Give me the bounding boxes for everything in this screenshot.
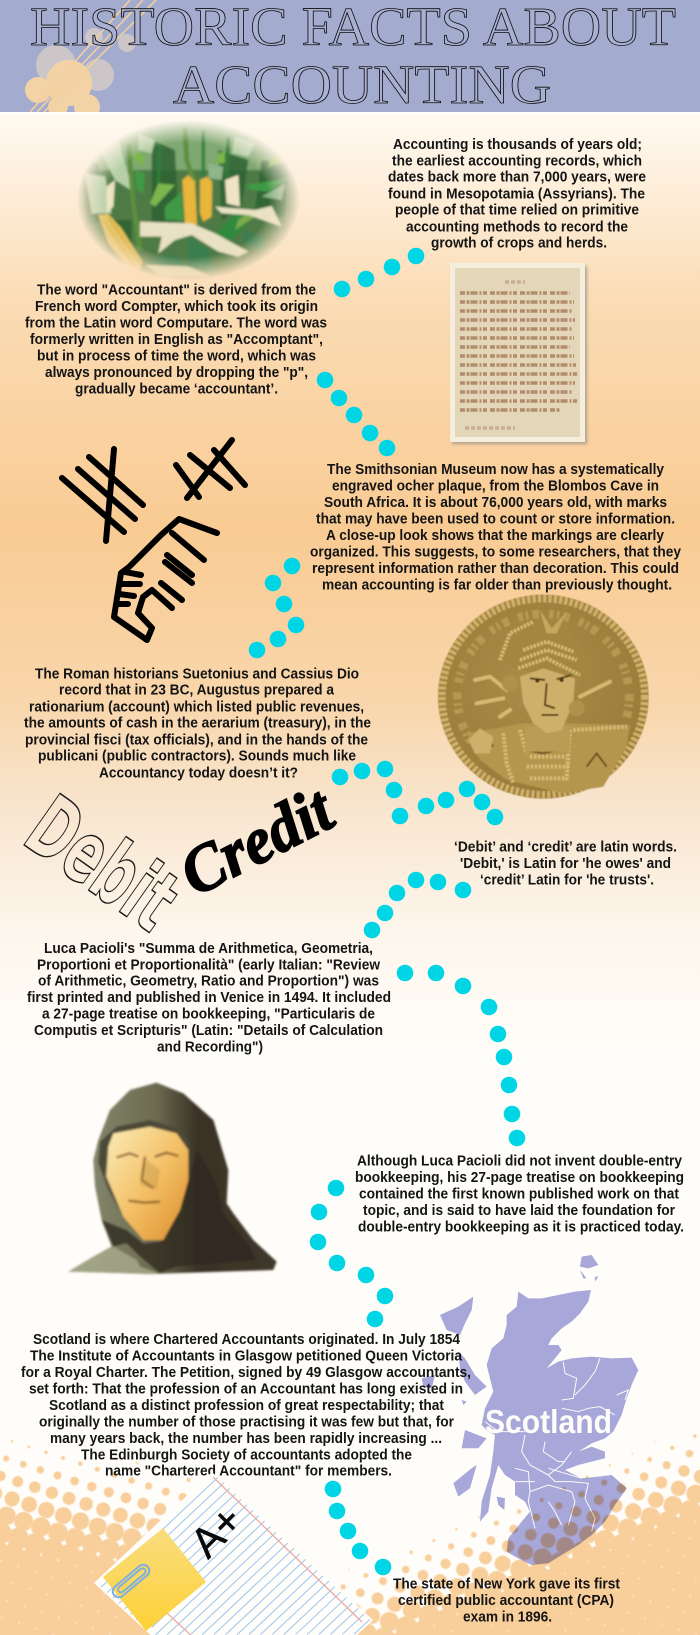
text block: Luca Pacioli's Summa: Luca Pacioli's "Summa de Arithmetica, Geometria,: [44, 941, 373, 957]
text block: double-entry bookkeeping: contained the first known published work on that: [359, 1187, 679, 1203]
text block: word accountant: gradually became ‘accountant’.: [75, 381, 278, 397]
text block: earliest records: accounting methods to record the: [406, 219, 628, 235]
dotted connector 5: [364, 872, 471, 938]
dotted connector 3: [249, 558, 304, 658]
text block: Roman historians: [24, 666, 371, 781]
image: gold Roman coin: [438, 595, 649, 799]
text block: Roman historians: record that in 23 BC, Augustus prepared a: [59, 683, 335, 699]
text block: debit and credit meaning: [454, 840, 677, 889]
text block: debit and credit meaning: ‘Debit’ and ‘credit’ are latin words.: [454, 840, 677, 856]
text block: double-entry bookkeeping: Although Luca Pacioli did not invent double-entry: [357, 1154, 682, 1170]
image: graded paper with sticky note: [94, 1472, 373, 1635]
text block: New York CPA exam: certified public accountant (CPA): [398, 1593, 614, 1609]
text block: Blombos plaque: engraved ocher plaque, from the Blombos Cave in: [332, 478, 659, 494]
text block: double-entry bookkeeping: bookkeeping, his 27-page treatise on bookkeeping: [355, 1170, 684, 1186]
text block: Scotland chartered accountants: The Institute of Accountants in Glasgow petitioned Queen Victoria: [30, 1348, 463, 1364]
text block: Scotland chartered accountants: Scotland as a distinct profession of great respectability; that: [49, 1398, 444, 1414]
head: [525, 727, 570, 752]
dotted connector 6: [397, 965, 525, 1146]
text block: New York CPA exam: exam in 1896.: [463, 1609, 552, 1625]
map of Scotland: [422, 1255, 638, 1565]
text block: Roman historians: publicani (public contractors). Sounds much like: [38, 749, 356, 765]
image: ancient manuscript: [450, 263, 587, 444]
text block: Roman historians: the amounts of cash in the aerarium (treasury), in the: [24, 716, 371, 732]
word art: Credit: Credit: [169, 772, 346, 910]
text block: Scotland chartered accountants: name "Chartered Accountant" for members.: [105, 1464, 392, 1480]
word art: Debit: Debit: [8, 777, 196, 951]
title banner: [0, 0, 700, 120]
bust: [467, 723, 630, 793]
text block: earliest records: growth of crops and herds.: [431, 236, 607, 252]
dotted connector 8: [325, 1481, 391, 1575]
face: [107, 1127, 188, 1240]
text block: word accountant: French word Compter, which took its origin: [35, 299, 318, 315]
text block: Scotland chartered accountants: The Edinburgh Society of accountants adopted the: [81, 1447, 412, 1463]
title: ACCOUNTING: [173, 54, 551, 115]
text block: Blombos plaque: mean accounting is far older than previously thought.: [322, 577, 672, 593]
text block: Roman historians: provincial fisci (tax officials), and in the hands of the: [25, 732, 368, 748]
text block: Blombos plaque: organized. This suggests, to some researchers, that they: [310, 544, 681, 560]
text block: Luca Pacioli's Summa: [27, 941, 391, 1056]
text block: Blombos plaque: that may have been used to count or store information.: [316, 511, 675, 527]
text block: Blombos plaque: South Africa. It is about 76,000 years old, with marks: [324, 495, 667, 511]
text block: New York CPA exam: The state of New York gave its first: [393, 1576, 620, 1592]
text block: debit and credit meaning: ‘credit’ Latin for 'he trusts'.: [480, 873, 654, 889]
icon: tally marks and hand: [62, 440, 245, 640]
text block: Scotland chartered accountants: for a Royal Charter. The Petition, signed by 49 Glasgow accountants,: [21, 1365, 471, 1381]
text block: Scotland chartered accountants: many years back, the number has been rapidly increasing ...: [50, 1431, 442, 1447]
map label: Scotland: Scotland: [485, 1403, 612, 1440]
text block: Roman historians: The Roman historians Suetonius and Cassius Dio: [35, 666, 359, 682]
text block: Roman historians: rationarium (account) which listed public revenues,: [29, 699, 364, 715]
text block: Luca Pacioli's Summa: Computis et Scripturis" (Latin: "Details of Calculation: [34, 1023, 383, 1039]
text block: word accountant: formerly written in English as "Accomptant",: [30, 332, 323, 348]
text block: word accountant: from the Latin word Computare. The word was: [25, 315, 327, 331]
text block: earliest records: people of that time relied on primitive: [395, 203, 639, 219]
text block: earliest records: the earliest accounting records, which: [392, 153, 642, 169]
text block: Blombos plaque: [310, 462, 681, 593]
hood: [68, 1083, 277, 1274]
text block: Luca Pacioli's Summa: Proportioni et Proportionalità" (early Italian: "Review: [37, 957, 381, 973]
text block: Scotland chartered accountants: originally the number of those practising it was few but that, for: [39, 1415, 454, 1431]
text block: word accountant: [25, 282, 327, 397]
text block: double-entry bookkeeping: [355, 1154, 684, 1236]
text block: Scotland chartered accountants: Scotland is where Chartered Accountants originated. In July 1854: [33, 1332, 460, 1348]
photo: corn field: [75, 120, 305, 285]
text block: earliest records: Accounting is thousands of years old;: [393, 137, 642, 153]
text block: New York CPA exam: [393, 1576, 620, 1625]
dotted connector 1: [334, 248, 424, 297]
text block: Blombos plaque: represent information rather than decoration. This could: [312, 561, 679, 577]
text block: debit and credit meaning: 'Debit,' is Latin for 'he owes' and: [460, 856, 671, 872]
sticky note: [103, 1528, 206, 1631]
text block: earliest records: found in Mesopotamia (Assyrians). The: [388, 186, 645, 202]
text block: word accountant: but in process of time the word, which was: [37, 348, 316, 364]
text block: Scotland chartered accountants: [21, 1332, 471, 1480]
text block: Roman historians: Accountancy today doesn’t it?: [99, 765, 298, 781]
helmet: [497, 618, 585, 678]
text block: earliest records: [388, 137, 646, 252]
text block: double-entry bookkeeping: double-entry bookkeeping as it is practiced today.: [358, 1220, 684, 1236]
text block: Luca Pacioli's Summa: and Recording"): [157, 1040, 263, 1056]
title: [30, 0, 676, 115]
text block: Blombos plaque: The Smithsonian Museum now has a systematically: [327, 462, 664, 478]
text block: earliest records: dates back more than 7,000 years, were: [388, 170, 646, 186]
banner decoration: [25, 0, 156, 120]
paperclip: [110, 1562, 152, 1600]
hand: [114, 519, 217, 640]
text block: double-entry bookkeeping: topic, and is said to have laid the foundation for: [363, 1203, 675, 1219]
text block: Blombos plaque: A close-up look shows that the markings are clearly: [326, 528, 664, 544]
dotted connector 7: [310, 1180, 393, 1327]
text block: word accountant: The word "Accountant" is derived from the: [37, 282, 316, 298]
text block: Luca Pacioli's Summa: of Arithmetic, Geometry, Ratio and Proportion") was: [38, 974, 379, 990]
dotted connector 2: [317, 372, 395, 456]
halftone dot background: [0, 1390, 700, 1635]
text block: word accountant: always pronounced by dropping the "p",: [45, 365, 308, 381]
text block: Luca Pacioli's Summa: a 27-page treatise on bookkeeping, "Particularis de: [42, 1007, 375, 1023]
text block: Scotland chartered accountants: set forth: That the profession of an Accountant has long existed in: [29, 1381, 463, 1397]
dotted connector 4: [332, 761, 503, 825]
tally marks: [62, 440, 245, 541]
lined paper: [94, 1472, 373, 1635]
text block: Luca Pacioli's Summa: first printed and published in Venice in 1494. It included: [27, 990, 391, 1006]
grade A+: A+: [181, 1496, 252, 1566]
image: portrait of Luca Pacioli: [68, 1083, 277, 1274]
